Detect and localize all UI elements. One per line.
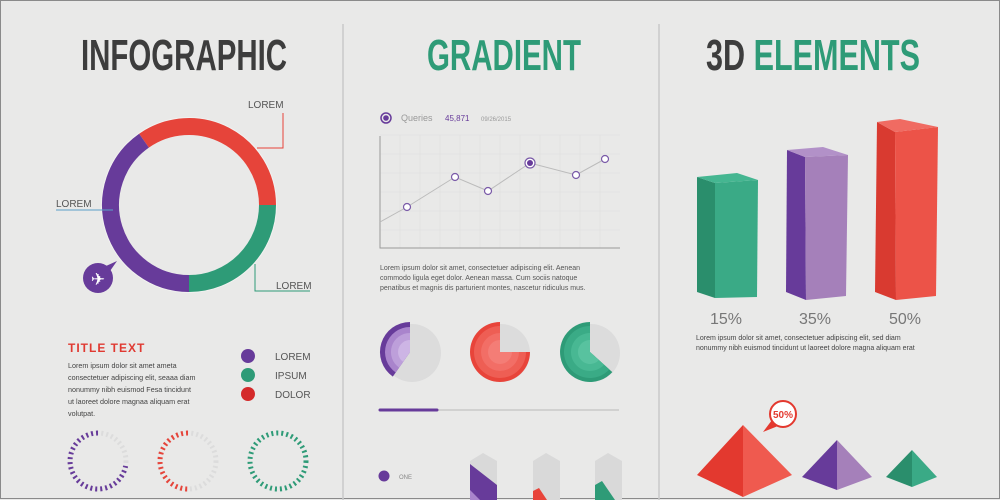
text block: chart caption: Lorem ipsum dolor sit amet, consectetuer adipiscing elit. Aenean [380,265,580,272]
text block: title text: Lorem ipsum dolor sit amet ameta [68,361,177,370]
bar: red 50% [875,119,938,328]
legend: IPSUM [275,371,307,382]
text block: title text: ut laoreet dolore magnaa aliquam erat [68,397,189,406]
text block: title text: consectetuer adipiscing elit, seaaa diam [68,373,195,382]
legend: DOLOR [275,390,311,401]
legend: LOREM [275,352,311,363]
3D bar chart [697,119,938,328]
bar: purple 35%: 35% [799,311,831,328]
legend [241,349,311,401]
callout: top lorem: LOREM [248,100,284,111]
chart header [381,113,512,123]
text block: title text [68,341,195,418]
pyramid: purple [802,440,872,490]
pie: red [470,322,530,382]
text block: chart caption [380,265,585,292]
callout: top lorem [248,100,284,148]
pie: green [560,322,620,382]
title: 3D elements: 3D ELEMENTS [706,31,920,80]
gradient pies [380,322,620,382]
text block: title text: TITLE TEXT [68,341,145,355]
bar: purple 35% [786,147,848,328]
text block: chart caption: penatibus et magnis dis parturient montes, nascetur ridiculus mus. [380,285,585,292]
icon: airplane bubble: ✈ [91,270,105,289]
callout: 50% bubble: 50% [773,410,793,421]
bar: green 15%: 15% [710,311,742,328]
legend: one: ONE [399,475,412,481]
callout: left lorem [56,199,113,210]
chart header: 09/26/2015 [481,117,512,123]
text block: title text: volutpat. [68,409,95,418]
title: gradient: GRADIENT [427,31,581,80]
pyramid: green [886,450,937,487]
progress bar [380,409,619,411]
chart header: Queries [401,113,433,123]
text block: chart caption: commodo ligula eget dolor. Aenean massa. Cum sociis natoque [380,275,577,282]
bar: red 50%: 50% [889,311,921,328]
donut chart [56,100,312,293]
callout: bottom lorem: LOREM [276,281,312,292]
callout: bottom lorem [255,264,312,292]
dashed progress circles [70,433,306,489]
title: infographic: INFOGRAPHIC [81,31,287,80]
pyramids [697,401,937,497]
text block: bars caption: nonummy nibh euismod tincidunt ut laoreet dolore magna aliquam erat [696,345,915,352]
line chart [380,113,620,248]
pyramid: red [697,425,792,497]
icon: airplane bubble [83,261,117,293]
legend: one [378,470,412,482]
callout: left lorem: LOREM [56,199,92,210]
callout: 50% bubble [763,401,796,432]
text block: title text: nonummy nibh euismod Fesa tincidunt [68,385,191,394]
chart header: 45,871 [445,114,470,123]
hexagon bars [470,453,622,500]
text block: bars caption [696,335,915,352]
text block: bars caption: Lorem ipsum dolor sit amet, consectetuer adipiscing elit, sed diam [696,335,901,342]
bar: green 15% [697,173,758,328]
pie: purple [380,322,441,382]
